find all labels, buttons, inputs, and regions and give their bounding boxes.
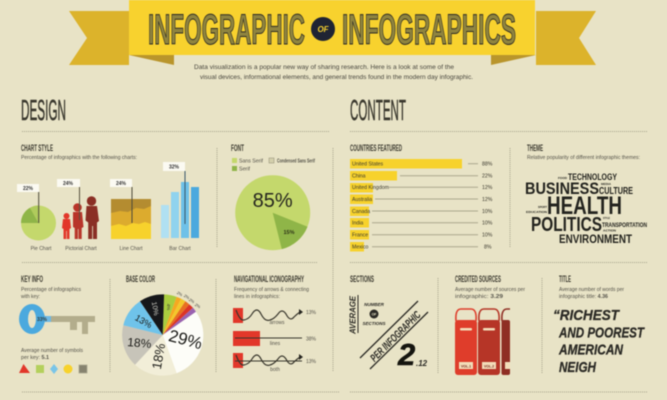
- pictorial chart icon: [57, 179, 99, 252]
- word cloud: MEDIA: [601, 182, 612, 186]
- countries bar chart: 22%: [482, 174, 493, 180]
- key info description: [21, 287, 82, 300]
- countries bar chart: India: [352, 220, 363, 226]
- font pie chart: 15%: [283, 230, 295, 236]
- lines row: lines: [270, 341, 281, 347]
- base color pie chart: [122, 290, 204, 376]
- countries bar chart: China: [352, 174, 366, 180]
- sections typographic lockup: OF: [372, 312, 377, 316]
- word cloud: CULTURE: [599, 186, 633, 197]
- sections typographic lockup: SECTIONS: [362, 321, 386, 326]
- theme description: Relative popularity of different infographic themes:: [527, 155, 640, 161]
- font legend: Sans Serif: [239, 158, 264, 164]
- bar chart icon: Bar Chart: [169, 246, 191, 252]
- panel: theme: [525, 143, 647, 246]
- font pie chart: [235, 175, 310, 250]
- panel: font: [231, 143, 315, 250]
- word cloud: SPORT: [538, 206, 547, 209]
- navigational description: [234, 287, 309, 300]
- key info description: with key:: [21, 294, 40, 300]
- bar chart icon: 32%: [169, 164, 180, 170]
- both row: 13%: [306, 359, 317, 365]
- word cloud: EDUCATION: [526, 210, 547, 214]
- theme heading: THEME: [527, 143, 543, 153]
- pie chart icon: [17, 184, 56, 252]
- countries heading: COUNTRIES FEATURED: [350, 143, 402, 153]
- intro text: [194, 64, 473, 81]
- credited sources description: infographic: 3.29: [455, 294, 503, 300]
- bar chart icon: [161, 162, 199, 252]
- arrows row: [233, 308, 317, 326]
- line chart icon: [110, 179, 151, 252]
- countries bar chart: United Kingdom: [352, 185, 389, 191]
- pictorial chart icon: Pictorial Chart: [65, 246, 97, 252]
- word cloud: ACTION: [603, 228, 616, 232]
- both row: [233, 353, 317, 373]
- title description: Average number of words per: [559, 287, 624, 293]
- icon: books: [455, 309, 510, 375]
- countries bar chart: Mexico: [352, 244, 369, 250]
- word cloud: POLITICS: [531, 214, 602, 236]
- countries bar chart: 88%: [482, 162, 493, 168]
- panel: credited sources: CREDITED SOURCES: [455, 274, 501, 284]
- both row: both: [270, 367, 280, 373]
- sections heading: SECTIONS: [350, 274, 374, 284]
- sample title quote: AMERICAN: [558, 342, 624, 358]
- intro text: visual devices, informational elements, and general trends found in the modern day infographic.: [200, 74, 473, 81]
- panel: title: [553, 274, 645, 376]
- panel: credited sources: [455, 274, 525, 375]
- icon: books: VOL.2: [484, 364, 494, 368]
- title description: [559, 287, 624, 300]
- base color pie chart: 2%: [188, 297, 196, 305]
- title description: infographic title: 4.36: [559, 294, 608, 300]
- text: CONTENT: [350, 95, 406, 127]
- base color pie chart: 29%: [167, 326, 204, 353]
- pictorial chart icon: 24%: [63, 181, 74, 187]
- countries bar chart: Canada: [352, 209, 370, 215]
- title text left: INFOGRAPHIC: [148, 6, 305, 54]
- word cloud: STYLE: [603, 217, 610, 220]
- panel: chart style: [17, 143, 199, 252]
- countries bar chart: United States: [352, 162, 384, 168]
- panel: key info: [19, 274, 95, 374]
- lines row: 38%: [306, 336, 317, 342]
- icon row: key symbols: [19, 364, 87, 374]
- countries bar chart: 12%: [482, 197, 493, 203]
- intro text: Data visualization is a popular new way of sharing research. Here is a look at some of the: [194, 64, 455, 71]
- line chart icon: 24%: [116, 181, 127, 187]
- navigational description: lines in infographics:: [234, 294, 280, 300]
- sample title quote: “RICHEST: [553, 307, 621, 324]
- credited sources description: [455, 287, 525, 300]
- countries bar chart: 8%: [484, 244, 492, 250]
- arrows row: 13%: [306, 310, 317, 316]
- navigational heading: NAVIGATIONAL ICONOGRAPHY: [234, 274, 304, 284]
- word cloud: BUSINESS: [525, 179, 599, 198]
- base color pie chart: 4%: [166, 304, 171, 310]
- word cloud: TECHNOLOGY: [568, 172, 617, 182]
- base color pie chart: 2%: [183, 293, 191, 301]
- font pie chart: 85%: [253, 190, 293, 212]
- countries bar chart: [350, 159, 493, 252]
- text: DESIGN: [21, 95, 66, 127]
- panel: sections: [348, 274, 428, 372]
- sections typographic lockup: NUMBER: [364, 302, 385, 307]
- navigational description: Frequency of arrows & connecting: [234, 287, 309, 293]
- panel: base color: [122, 274, 204, 376]
- base color pie chart: 2%: [194, 302, 202, 310]
- word cloud: HEALTH: [547, 192, 622, 220]
- panel: navigational iconography: [233, 274, 317, 373]
- word cloud: [525, 172, 647, 246]
- font legend: [232, 158, 315, 172]
- word cloud: FOOD: [558, 177, 567, 180]
- lines row: [233, 331, 317, 347]
- base color pie chart: 18%: [127, 335, 152, 351]
- countries bar chart: 10%: [482, 220, 493, 226]
- key info description: Percentage of infographics: [21, 287, 82, 293]
- panel: title: TITLE: [559, 274, 571, 284]
- base color pie chart: 13%: [133, 313, 154, 330]
- title badge: of: [311, 17, 335, 41]
- symbols description: per key: 5.1: [21, 355, 49, 361]
- base color pie chart: 2%: [176, 290, 184, 298]
- sections typographic lockup: .12: [416, 359, 428, 368]
- countries bar chart: Australia: [352, 197, 372, 203]
- title badge: of: OF: [317, 25, 330, 34]
- base color pie chart: 18%: [149, 342, 168, 370]
- countries bar chart: 10%: [482, 209, 493, 215]
- symbols description: Average number of symbols: [21, 348, 83, 354]
- sections typographic lockup: PER INFOGRAPHIC: [368, 309, 424, 364]
- sample title quote: NEIGH: [559, 359, 597, 376]
- sample title quote: AND POOREST: [558, 324, 645, 342]
- pie chart icon: Pie Chart: [31, 246, 52, 252]
- font heading: FONT: [231, 143, 244, 153]
- countries bar chart: 10%: [482, 232, 493, 238]
- sections typographic lockup: 2: [397, 337, 415, 372]
- sections typographic lockup: AVERAGE: [348, 296, 358, 335]
- credited sources description: Average number of sources per: [455, 287, 525, 293]
- word cloud: ENVIRONMENT: [559, 232, 633, 246]
- icon: key: 33%: [37, 317, 48, 323]
- word cloud: TRANSPORTATION: [602, 223, 647, 229]
- symbols description: [21, 348, 83, 361]
- pie chart icon: 22%: [23, 186, 34, 192]
- countries bar chart: France: [352, 232, 368, 238]
- arrows row: arrows: [269, 320, 285, 326]
- countries bar chart: 12%: [482, 185, 493, 191]
- line chart icon: Line Chart: [119, 246, 143, 252]
- panel: base color: BASE COLOR: [126, 274, 155, 284]
- font legend: Condensed Sans Serif: [277, 158, 315, 164]
- font legend: Serif: [239, 166, 251, 172]
- base color pie chart: 10%: [150, 301, 159, 316]
- sections typographic lockup: [348, 295, 428, 372]
- key info heading: KEY INFO: [21, 274, 43, 284]
- sample title quote: [553, 307, 645, 376]
- icon: books: VOL.1: [461, 364, 471, 368]
- panel: countries featured: [350, 143, 493, 252]
- title text right: INFOGRAPHICS: [342, 6, 516, 54]
- title banner: [69, 0, 596, 65]
- chart style heading: CHART STYLE: [21, 143, 53, 153]
- chart style description: Percentage of infographics with the following charts:: [21, 155, 137, 161]
